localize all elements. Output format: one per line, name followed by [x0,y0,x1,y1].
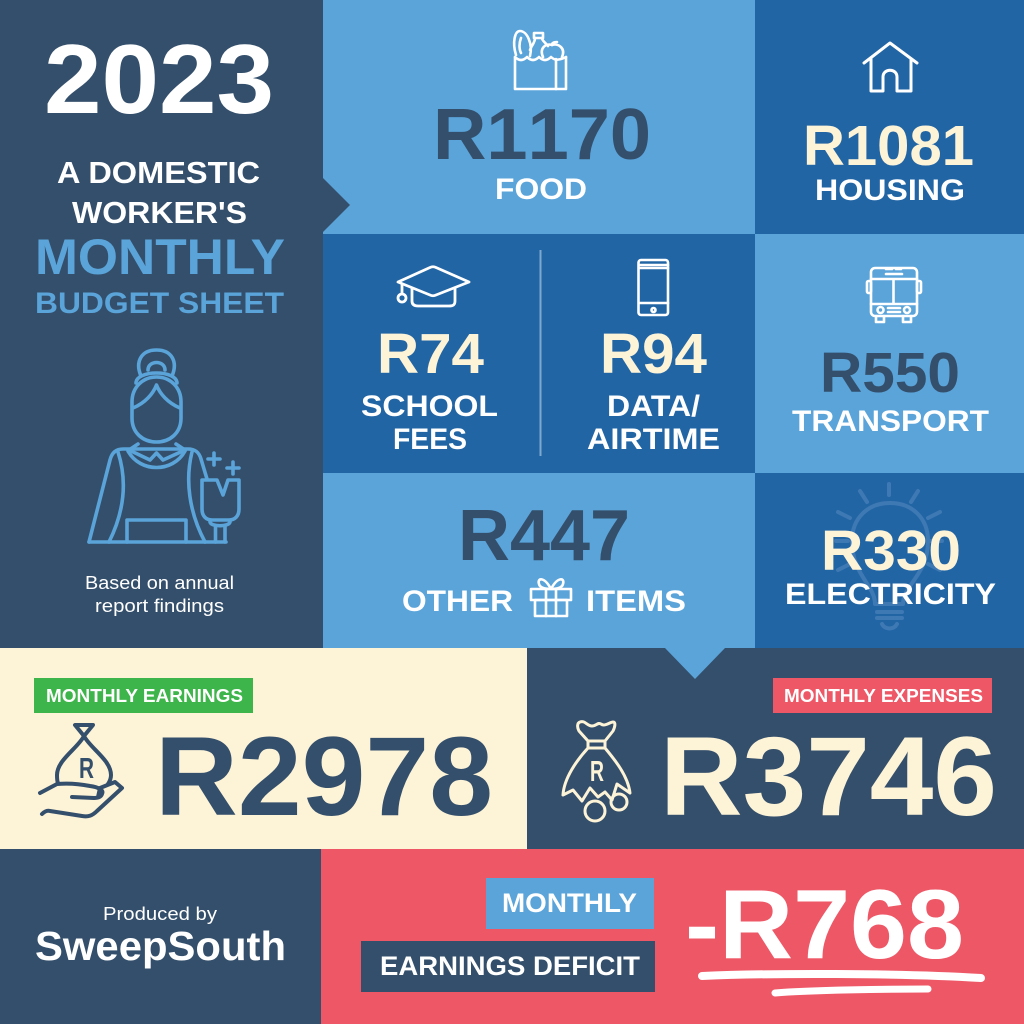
label: other items: ITEMS [586,585,686,618]
underline scribble [702,974,981,993]
panel: housing [755,0,1024,235]
icon: grocery bag [514,31,566,89]
text: based on annual report findings: Based on annual [85,572,234,593]
label: school fees [361,390,498,456]
tag: monthly earnings: MONTHLY EARNINGS [46,686,243,706]
heading: year: 2023 [44,24,274,134]
panel: monthly expenses [527,648,1024,849]
heading: a domestic worker's monthly budget sheet: MONTHLY [35,229,285,285]
icon letter: R: R [79,753,94,785]
heading: a domestic worker's monthly budget sheet: A DOMESTIC [57,156,260,190]
panel: transport [755,234,1024,473]
logo: SweepSouth: SweepSouth [35,923,286,969]
tag: monthly earnings [34,678,253,713]
value: R1170: R1170 [433,95,651,175]
label: school fees: FEES [393,423,467,456]
panel: electricity [755,473,1024,648]
value: R74: R74 [377,322,484,386]
label: school fees: SCHOOL [361,390,498,423]
label: other items: OTHER [402,585,513,618]
value: R2978: R2978 [155,714,493,839]
label: transport: TRANSPORT [792,405,989,438]
panel: other items [323,473,755,648]
label: food: FOOD [495,173,587,206]
tag: monthly expenses: MONTHLY EXPENSES [784,686,983,706]
label: data/airtime: AIRTIME [587,423,720,456]
tag: monthly: MONTHLY [502,888,637,918]
arrow: sidebar pointer [322,177,350,233]
heading: a domestic worker's monthly budget sheet [35,156,285,320]
value: R1081: R1081 [803,114,974,178]
icon: domestic worker [89,350,239,542]
tag: earnings deficit [361,941,655,992]
tag: monthly expenses [773,678,992,713]
heading: a domestic worker's monthly budget sheet: WORKER'S [72,196,247,230]
label: other items [402,585,686,618]
panel: monthly earnings deficit [321,849,1024,1024]
panel: producer credit [0,849,321,1024]
icon: spilling money bag [563,722,630,821]
label: electricity: ELECTRICITY [785,578,996,611]
arrow: expenses pointer [665,648,725,679]
icon: light bulb [836,484,942,628]
value: R94: R94 [600,322,707,386]
icon: smartphone [638,260,668,315]
value: R330: R330 [821,519,961,583]
panel: monthly earnings [0,648,527,849]
text: based on annual report findings [85,572,234,616]
icon: gift box [531,579,571,616]
value: -R768: -R768 [685,869,964,979]
value: R447: R447 [458,496,630,576]
heading: a domestic worker's monthly budget sheet: BUDGET SHEET [35,287,284,320]
label: data/airtime [587,390,720,456]
label: housing: HOUSING [815,174,965,207]
tag: earnings deficit: EARNINGS DEFICIT [380,951,641,981]
panel: title sidebar [0,0,323,648]
panel: food [323,0,755,235]
icon: house [864,43,917,91]
icon letter: R: R [590,756,604,788]
text: based on annual report findings: report findings [95,595,224,616]
value: R550: R550 [820,341,960,405]
icon: bus [867,268,921,322]
panel: school fees and data [323,234,755,473]
label: data/airtime: DATA/ [607,390,701,423]
icon: hand holding money bag [40,725,122,816]
text: produced by: Produced by [103,903,218,924]
icon: graduation cap [398,267,469,306]
value: R3746: R3746 [660,714,997,839]
tag: monthly [486,878,654,929]
